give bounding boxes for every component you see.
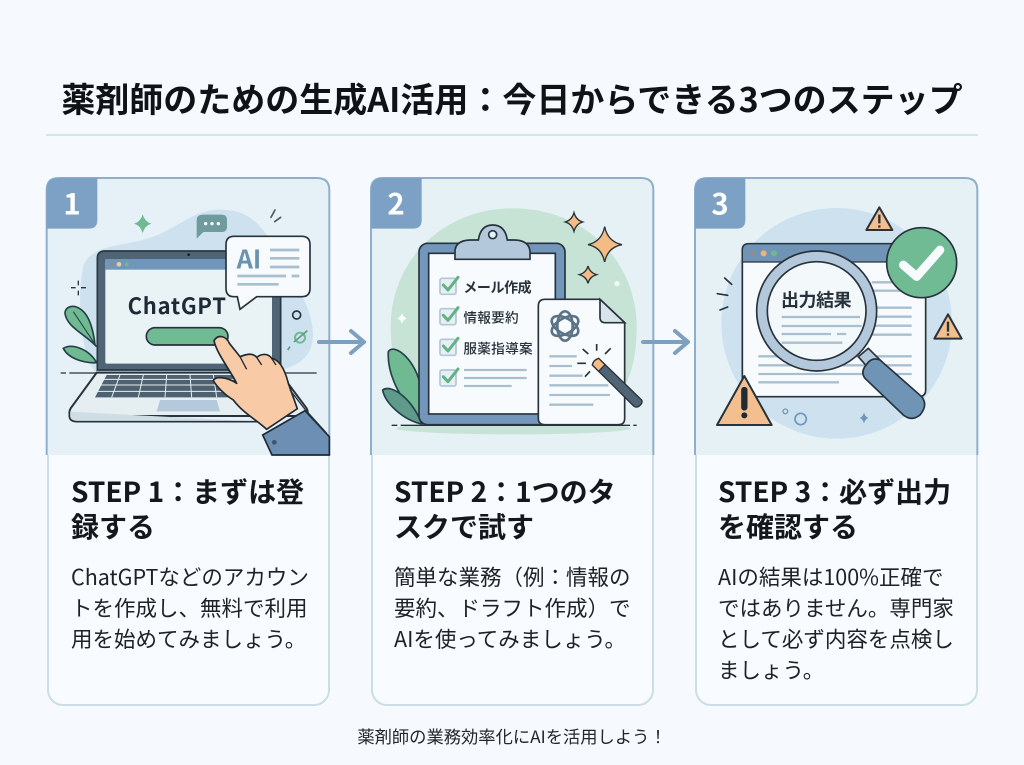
clipboard xyxy=(419,225,565,425)
text: step 1: STEP 1：まずは登 xyxy=(71,471,304,511)
callout: AI speech bubble xyxy=(226,236,310,309)
text: step 1: 用を始めてみましょう。 xyxy=(71,623,306,654)
icon: sparkle xyxy=(134,214,151,233)
text: step 1: トを作成し、無料で利用 xyxy=(71,592,308,623)
callout: AI speech bubble: AI xyxy=(236,241,261,277)
text: step 2: STEP 2：1つのタ xyxy=(394,471,616,511)
footer note: 薬剤師の業務効率化にAIを活用しよう！ xyxy=(357,723,667,748)
icon: leaves xyxy=(383,349,422,424)
text: step 3: ではありません。専門家 xyxy=(718,592,954,623)
badge number 2 xyxy=(371,178,422,229)
checklist: 服薬指導案 xyxy=(463,337,533,357)
badge number 3 xyxy=(695,178,745,229)
background blob xyxy=(80,210,313,373)
background circle xyxy=(721,208,952,439)
text: step 1 xyxy=(71,471,309,654)
icon: magic wand xyxy=(577,344,642,407)
text: step 2: スクで試す xyxy=(394,506,534,546)
checklist: メール作成 xyxy=(463,277,532,297)
text: step 3: STEP 3：必ず出力 xyxy=(718,471,951,511)
text: output result: 出力結果 xyxy=(781,287,852,313)
title: 薬剤師のための生成AI活用：今日からできる3つのステップ xyxy=(61,73,963,122)
text: step 1: 録する xyxy=(71,506,155,546)
text: step 1: ChatGPTなどのアカウン xyxy=(71,561,309,592)
icon: pointing hand xyxy=(213,337,329,455)
arrow: step 1 to 2 xyxy=(319,331,364,353)
background circle xyxy=(391,208,637,425)
icon: warning triangles xyxy=(717,207,962,425)
button xyxy=(146,328,228,345)
magnifying glass xyxy=(757,251,925,418)
illustration: step 2 xyxy=(371,178,653,455)
arrow: step 2 to 3 xyxy=(643,331,688,353)
text: step 2: 簡単な業務（例：情報の xyxy=(394,561,631,592)
document with logo xyxy=(538,299,625,425)
illustration: step 1 xyxy=(47,178,329,455)
text: step 3: ましょう。 xyxy=(718,654,824,685)
text: step 2: AIを使ってみましょう。 xyxy=(394,623,626,654)
badge number 3: 3 xyxy=(711,182,729,224)
badge number 1: 1 xyxy=(63,182,81,224)
checklist xyxy=(440,277,533,386)
text: step 3: として必ず内容を点検し xyxy=(718,623,954,654)
icon: green check badge xyxy=(887,228,957,298)
text: step 3 xyxy=(718,471,954,685)
icon: chat bubble xyxy=(197,215,227,239)
badge number 1 xyxy=(47,178,97,229)
checklist: 情報要約 xyxy=(463,307,519,327)
browser window xyxy=(742,244,926,397)
text: step 2 xyxy=(394,471,631,654)
laptop xyxy=(61,251,317,422)
text: step 3: を確認する xyxy=(718,506,858,546)
badge number 2: 2 xyxy=(387,182,405,224)
panel: step 1 card xyxy=(47,178,330,706)
text: step 3: AIの結果は100%正確で xyxy=(718,561,943,592)
icon: sparkles xyxy=(565,213,622,283)
panel: step 3 card xyxy=(695,178,978,706)
panel: step 2 card xyxy=(371,178,654,706)
text: ChatGPT: ChatGPT xyxy=(128,289,226,321)
icon: leaves xyxy=(63,306,97,363)
illustration: step 3 xyxy=(695,178,977,455)
text: step 2: 要約、ドラフト作成）で xyxy=(394,592,631,623)
